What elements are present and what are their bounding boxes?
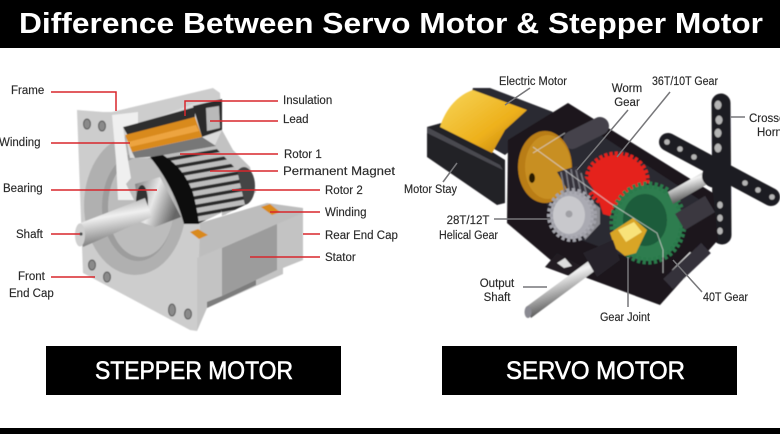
banner: stepper motor: STEPPER MOTOR [95, 357, 293, 385]
stepper: shaft [78, 198, 152, 247]
servo: gold gear joint [610, 218, 647, 256]
label: 28T/12T Helical Gear [439, 215, 550, 242]
stepper: circular recess [84, 135, 186, 275]
servo: post [572, 126, 600, 140]
label: Insulation [185, 95, 332, 116]
servo: output shaft [526, 254, 604, 318]
label: Crossed Horn [730, 113, 780, 139]
label: 40T Gear [673, 260, 748, 304]
label: Front End Cap: End Cap [9, 288, 54, 300]
servo: lower post [668, 248, 706, 284]
stepper: back plate behind rotor [190, 130, 256, 215]
label: Front End Cap [9, 271, 95, 300]
label: Winding right: Winding [325, 207, 367, 219]
label: Shaft: Shaft [16, 229, 44, 241]
banner: servo motor: SERVO MOTOR [506, 357, 685, 385]
stepper: winding tabs [190, 229, 208, 239]
servo: cross horn [664, 100, 775, 235]
label: Electric Motor: Electric Motor [499, 76, 567, 88]
servo: bottom foot [545, 253, 585, 280]
label: Motor Stay: Motor Stay [404, 184, 457, 196]
label: Winding right [270, 207, 367, 219]
servo: yellow electric motor [440, 90, 527, 153]
label: Rotor 1: Rotor 1 [284, 149, 322, 161]
stepper motor illustration [75, 88, 303, 331]
label: 36T/10T Gear [617, 76, 718, 157]
servo: worm gear [557, 166, 594, 203]
servo: green gear [613, 185, 683, 261]
bottom bar [0, 428, 780, 434]
servo: gold disc [518, 131, 572, 203]
label: Permanent Magnet: Permanent Magnet [283, 166, 396, 178]
label: Output Shaft: Output [480, 278, 515, 290]
label: Gear Joint [600, 257, 651, 324]
servo: bracket window [672, 252, 700, 280]
label: 36T/10T Gear: 36T/10T Gear [652, 76, 718, 88]
label: Motor Stay [404, 163, 457, 196]
stepper: plate screws [84, 119, 192, 319]
label: Rotor 2 [232, 185, 363, 197]
label: Bearing: Bearing [3, 183, 43, 195]
stepper: rear end cap and right side [197, 213, 303, 331]
stepper: rear body top [160, 203, 303, 258]
label: 40T Gear: 40T Gear [703, 292, 748, 304]
stepper: rotor 2 [233, 167, 255, 205]
label: 28T/12T Helical Gear: 28T/12T [447, 215, 489, 227]
stepper: front plate [77, 88, 222, 331]
label: Stator: Stator [325, 252, 356, 264]
stepper: rotor 1 [160, 146, 223, 224]
title: Difference Between Servo Motor & Stepper Motor [19, 8, 763, 40]
label: Rotor 2: Rotor 2 [325, 185, 363, 197]
servo: red gear [588, 155, 646, 216]
stepper: cut-away interior [125, 100, 222, 158]
servo: gearbox frame [507, 103, 718, 305]
label: Rear End Cap: Rear End Cap [325, 230, 398, 242]
label: Worm Gear [577, 83, 642, 170]
label: Winding left: Winding [0, 137, 41, 149]
label: Lead [210, 114, 309, 126]
label: 28T/12T Helical Gear: Helical Gear [439, 230, 498, 242]
servo: motor casing [460, 88, 553, 155]
label: Insulation: Insulation [283, 95, 332, 107]
servo: silver helical gear [550, 191, 600, 240]
label: Frame: Frame [11, 85, 44, 97]
banner: stepper motor [46, 346, 341, 395]
title bar [0, 0, 780, 48]
label: Output Shaft [480, 278, 547, 304]
servo labels and leader lines [404, 76, 780, 324]
label: Gear Joint: Gear Joint [600, 312, 651, 324]
stepper: bearing [135, 177, 181, 227]
label: Winding left [0, 137, 130, 149]
servo: upper output shaft [668, 167, 718, 204]
label: Electric Motor [499, 76, 567, 105]
servo: frame outline strokes [533, 133, 663, 273]
servo motor illustration [427, 88, 775, 318]
stepper: black rotor crescent [150, 155, 199, 224]
servo: post right [680, 204, 710, 222]
stepper labels and leader lines [0, 85, 398, 300]
label: Worm Gear: Worm [612, 83, 642, 95]
stepper: orange winding [125, 117, 202, 152]
banner: servo motor [442, 346, 737, 395]
label: Output Shaft: Shaft [484, 292, 511, 304]
label: Stator [250, 252, 356, 264]
label: Frame [11, 85, 116, 111]
stepper: stator band [222, 224, 277, 296]
label: Front End Cap: Front [18, 271, 46, 283]
label: Worm Gear: Gear [614, 97, 640, 109]
label: Shaft [16, 229, 80, 241]
servo: motor stay [427, 122, 505, 205]
label: Lead: Lead [283, 114, 309, 126]
stepper: white frame section [112, 112, 138, 200]
